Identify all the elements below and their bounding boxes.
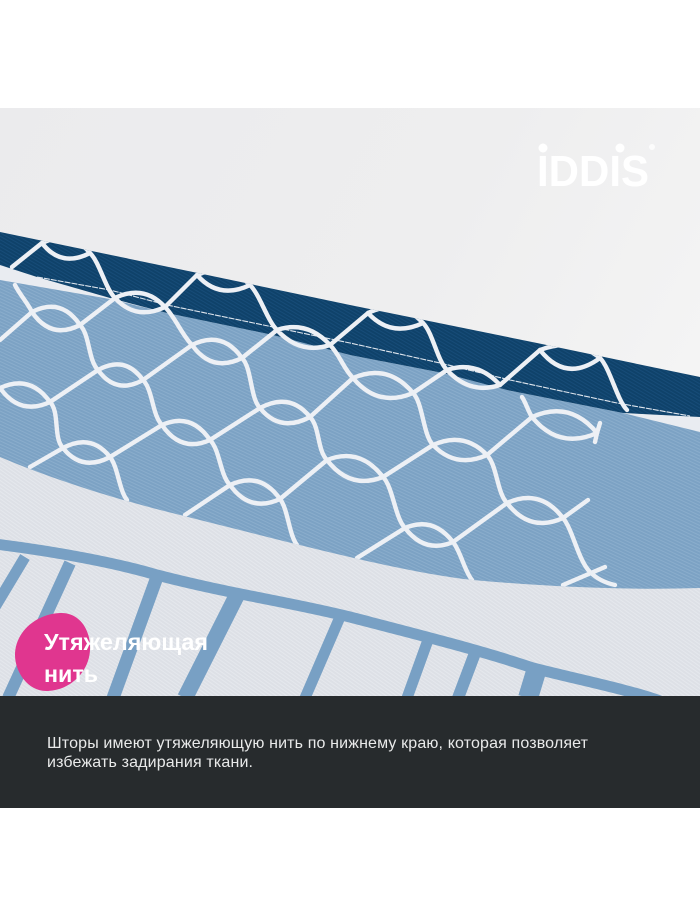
photo background: [0, 108, 700, 696]
white fold band: [0, 263, 700, 433]
photo: curtain fabric: [0, 232, 700, 701]
caption text: Шторы имеют утяжеляющую нить по нижнему краю, которая позволяет: [47, 735, 589, 752]
fabric base: [0, 262, 700, 696]
heading: Утяжеляющая нить: Утяжеляющая: [44, 629, 208, 655]
dark blue hem strip: [0, 232, 700, 417]
dark caption panel: [0, 696, 700, 808]
caption text: [47, 735, 589, 771]
hem stitching: [37, 277, 690, 416]
infographic canvas: [0, 108, 700, 808]
caption text: избежать задирания ткани.: [47, 754, 253, 771]
blue printed panel: [0, 280, 700, 589]
heading: Утяжеляющая нить: [44, 629, 208, 687]
lower stripe print: [0, 544, 660, 701]
pink accent blob: [15, 613, 90, 691]
wire net pattern: [0, 238, 627, 585]
logo: IDDIS: IDDIS: [537, 147, 649, 196]
heading: Утяжеляющая нить: нить: [44, 661, 98, 687]
